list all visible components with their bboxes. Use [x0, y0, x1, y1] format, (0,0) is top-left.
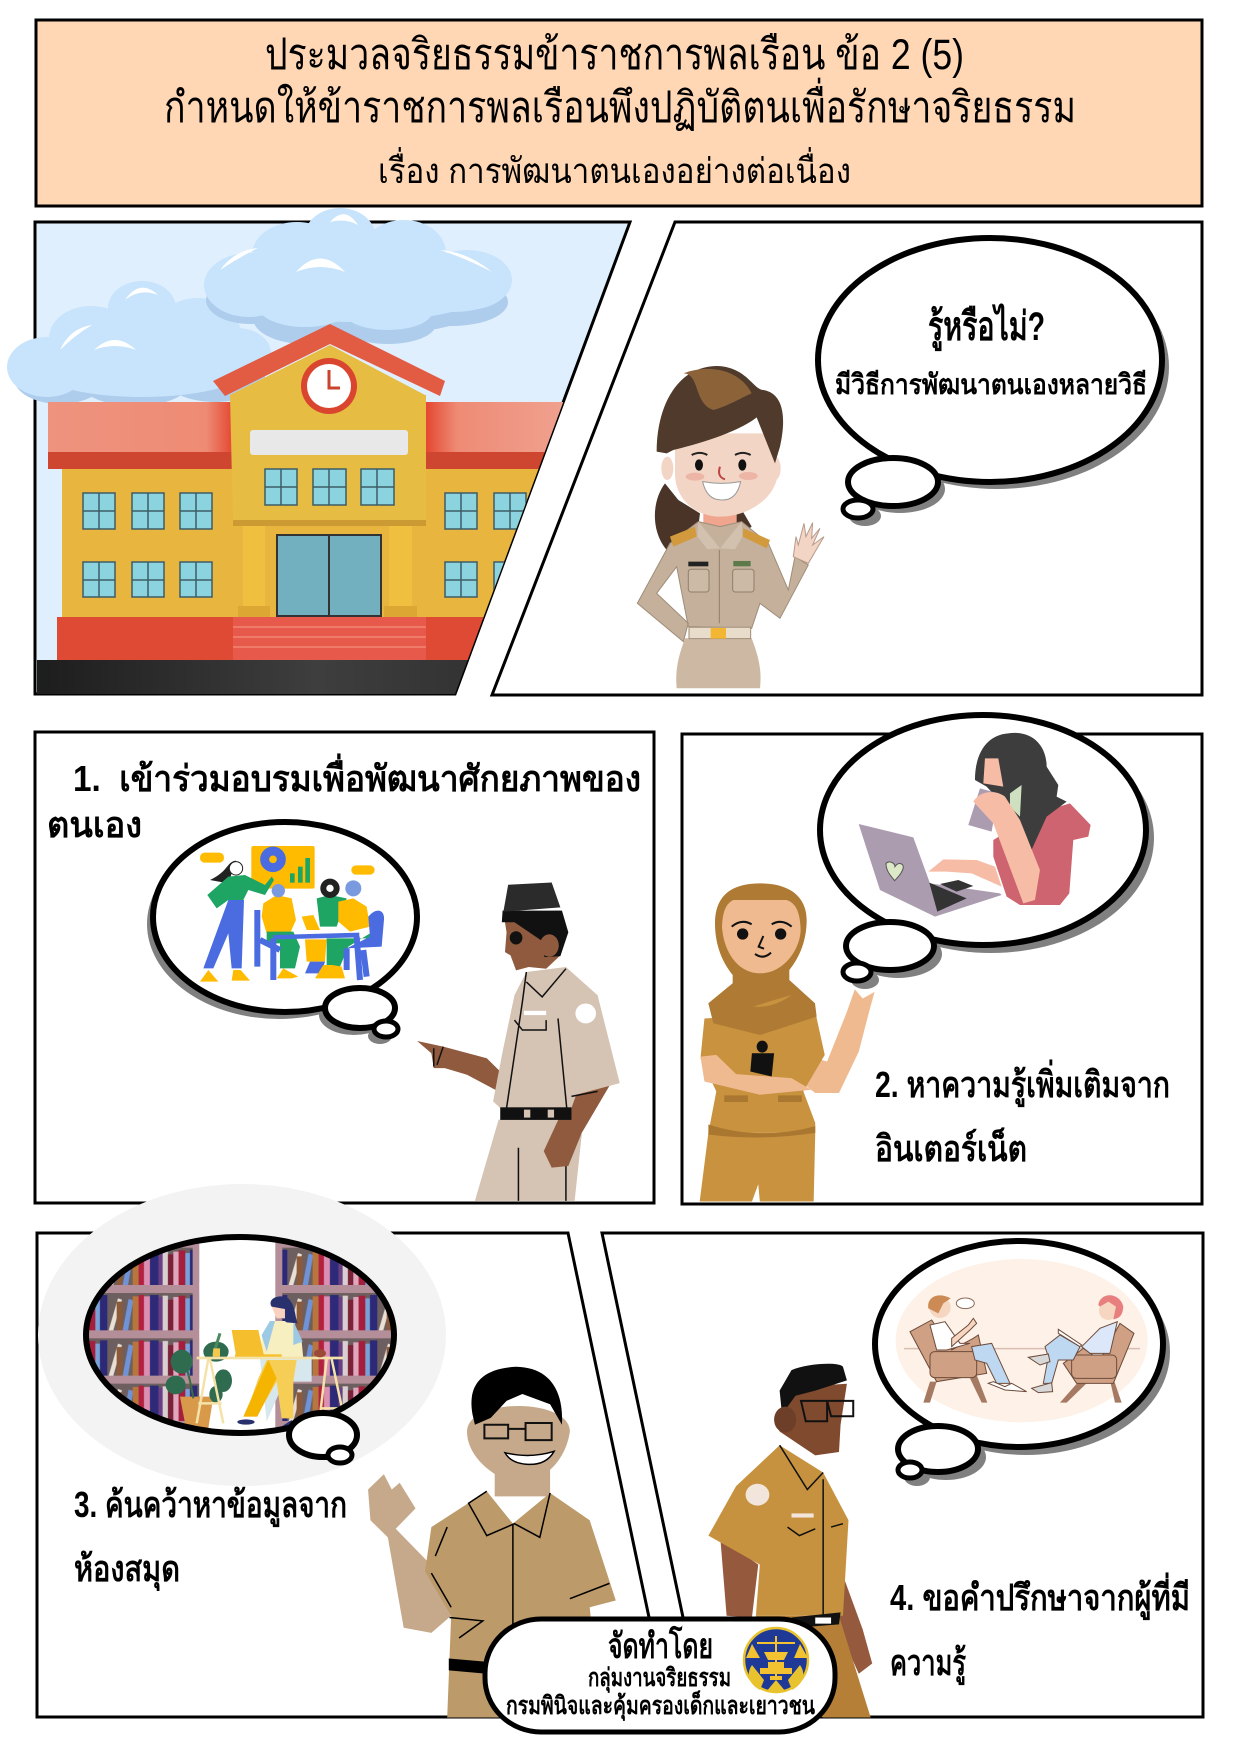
title line 2: กำหนดให้ข้าราชการพลเรือนพึงปฏิบัติตนเพื่อรักษาจริยธรรม — [164, 78, 1076, 132]
subtitle: เรื่อง การพัฒนาตนเองอย่างต่อเนื่อง — [378, 147, 851, 191]
illustration: dark-skinned officer — [708, 1364, 872, 1717]
step 1 text line 1: 1. เข้าร่วมอบรมเพื่อพัฒนาศักยภาพของ — [73, 753, 641, 799]
illustration: officer with glasses — [368, 1367, 616, 1717]
decorative halo behind library bubble — [38, 1184, 446, 1486]
panel: counselling — [602, 1233, 1203, 1717]
illustration: officer with cap pointing — [417, 882, 620, 1201]
credit heading: จัดทำโดย — [608, 1625, 713, 1666]
panel: woman officer — [492, 222, 1202, 695]
icon: department emblem — [744, 1628, 808, 1692]
woman at laptop illustration — [859, 733, 1091, 917]
step 4 text line 2: ความรู้ — [890, 1642, 966, 1686]
panel: library — [37, 1233, 670, 1717]
illustration: clouds — [7, 208, 512, 406]
counselling illustration — [896, 1259, 1148, 1422]
step 2 text line 1: 2. หาความรู้เพิ่มเติมจาก — [875, 1059, 1170, 1108]
speech bubble: training scene — [147, 822, 417, 1044]
step 2 text line 2: อินเตอร์เน็ต — [875, 1126, 1027, 1169]
step 1 text line 2: ตนเอง — [47, 804, 142, 845]
panel: training — [35, 732, 654, 1203]
credit team: กลุ่มงานจริยธรรม — [588, 1664, 731, 1694]
panel: school sky — [35, 222, 630, 694]
speech bubble: counselling scene — [875, 1241, 1170, 1486]
library illustration — [89, 1242, 391, 1428]
credit badge — [485, 1619, 835, 1732]
illustration: woman officer — [637, 366, 824, 688]
step 3 text line 2: ห้องสมุด — [74, 1548, 180, 1592]
panel: internet — [682, 734, 1202, 1204]
training illustration — [200, 846, 384, 982]
title panel — [36, 20, 1202, 206]
credit department: กรมพินิจและคุ้มครองเด็กและเยาวชน — [506, 1690, 815, 1722]
step 3 text line 1: 3. ค้นคว้าหาข้อมูลจาก — [74, 1484, 347, 1528]
bubble text: มีวิธีการพัฒนาตนเองหลายวิธี — [835, 369, 1147, 400]
speech bubble: laptop scene — [820, 715, 1154, 989]
illustration: woman with hijab — [700, 883, 875, 1201]
speech bubble: library scene — [80, 1235, 398, 1463]
bubble heading: รู้หรือไม่? — [928, 303, 1045, 351]
title line 1: ประมวลจริยธรรมข้าราชการพลเรือน ข้อ 2 (5) — [265, 31, 964, 79]
illustration: school building — [37, 324, 597, 694]
speech bubble: did you know — [818, 238, 1169, 526]
